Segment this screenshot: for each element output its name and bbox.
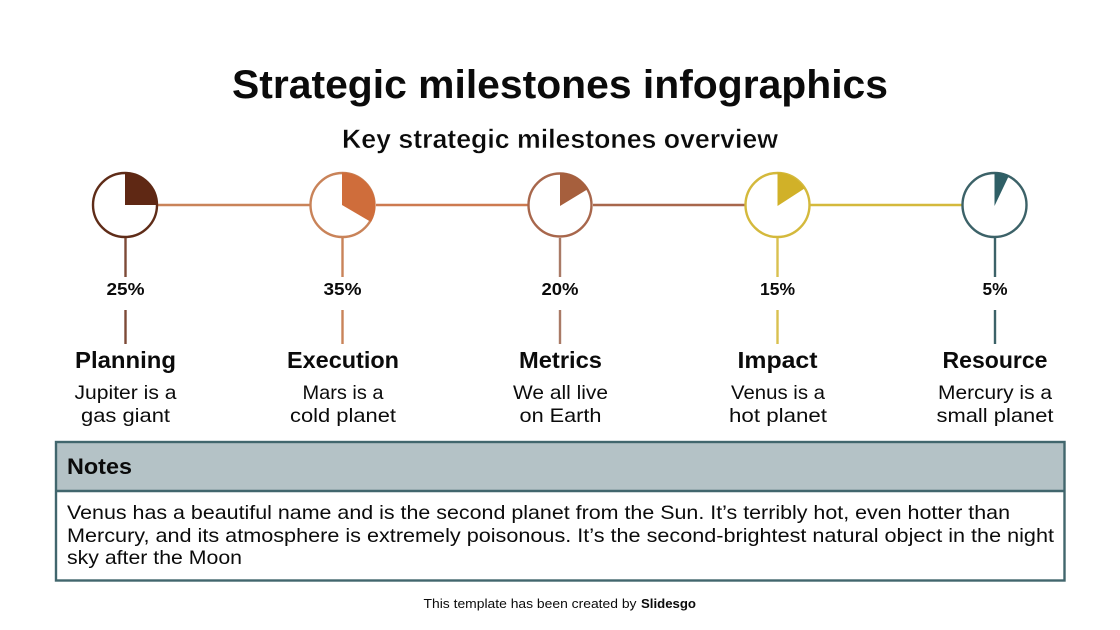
description xyxy=(74,382,177,427)
value: 5% xyxy=(982,279,1008,299)
milestone: metrics xyxy=(513,172,608,427)
subtitle: Key strategic milestones overview xyxy=(342,124,778,154)
stem xyxy=(341,238,344,344)
footer credit: Slidesgo xyxy=(641,596,696,611)
milestone: resource xyxy=(936,172,1054,427)
stem xyxy=(776,238,779,344)
milestone: execution xyxy=(287,172,399,427)
description: hot planet xyxy=(729,405,828,427)
footer credit: This template has been created by xyxy=(424,596,637,611)
description: gas giant xyxy=(81,405,171,427)
description xyxy=(936,382,1054,427)
title: Strategic milestones infographics xyxy=(232,63,888,107)
value: 20% xyxy=(542,279,579,299)
label: Execution xyxy=(287,347,399,373)
description: Jupiter is a xyxy=(74,382,177,404)
description: Mars is a xyxy=(302,382,384,404)
description: We all live xyxy=(513,382,608,404)
stem xyxy=(124,238,127,344)
description xyxy=(729,382,828,427)
icon: pie 20% xyxy=(528,172,592,236)
label: Resource xyxy=(942,347,1048,373)
label: Metrics xyxy=(519,347,602,373)
description: small planet xyxy=(936,405,1054,427)
notes body: Mercury, and its atmosphere is extremely poisonous. It’s the second-brightest natural object in the night xyxy=(67,525,1055,547)
description: Venus is a xyxy=(731,382,825,404)
value: 25% xyxy=(106,279,145,299)
icon: pie 5% xyxy=(962,172,1026,237)
panel: notes xyxy=(56,442,1064,580)
value: 35% xyxy=(324,279,362,299)
notes heading: Notes xyxy=(67,454,132,479)
description: on Earth xyxy=(520,405,602,427)
stem xyxy=(559,238,561,344)
milestone: planning xyxy=(74,172,177,427)
milestone: impact xyxy=(729,172,828,427)
description: cold planet xyxy=(290,405,397,427)
notes body: sky after the Moon xyxy=(67,547,242,569)
description: Mercury is a xyxy=(938,382,1052,404)
description xyxy=(290,382,397,427)
stem xyxy=(994,238,996,344)
icon: pie 35% xyxy=(310,172,375,237)
notes body xyxy=(67,502,1055,569)
notes header xyxy=(56,442,1064,491)
label: Planning xyxy=(75,347,176,373)
notes body: Venus has a beautiful name and is the second planet from the Sun. It’s terribly hot, even hotter than xyxy=(67,502,1010,524)
value: 15% xyxy=(760,279,795,299)
description xyxy=(513,382,608,427)
icon: pie 25% xyxy=(93,172,158,237)
label: Impact xyxy=(738,347,818,373)
icon: pie 15% xyxy=(746,172,810,237)
notes frame xyxy=(56,442,1064,580)
connector lines xyxy=(158,204,962,206)
